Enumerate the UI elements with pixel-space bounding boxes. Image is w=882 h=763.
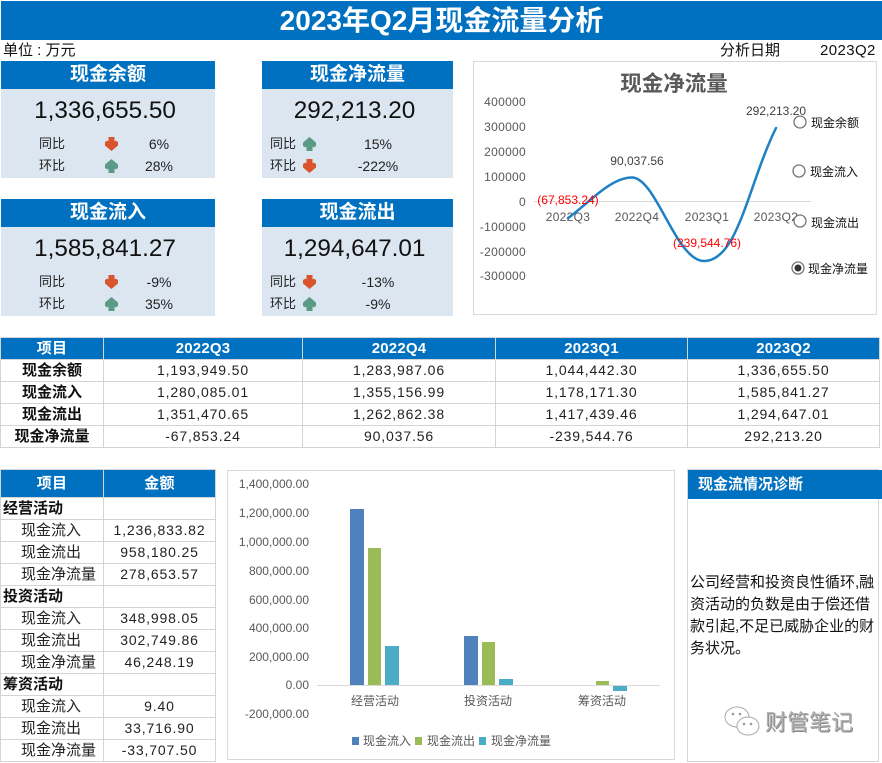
activity amount table (0, 469, 216, 762)
activity amount table: 46,248.19 (125, 654, 194, 670)
activity amount table: 现金流出 (21, 632, 81, 649)
quarterly data table: 1,355,156.99 (353, 384, 445, 400)
data labels (537, 104, 806, 250)
activity amount table: 302,749.86 (120, 632, 199, 648)
card heading (1, 61, 215, 89)
quarterly data table: 1,193,949.50 (157, 362, 249, 378)
legend (352, 733, 551, 748)
quarter on quarter label: 环比 (39, 296, 65, 311)
icon: up arrow (303, 137, 316, 151)
quarterly data table: 现金流入 (22, 384, 82, 401)
radio option: cash balance: 现金余额 (811, 115, 859, 130)
quarterly data table: 2023Q1 (564, 340, 619, 357)
icon: down arrow (105, 275, 118, 289)
category labels: 筹资活动 (578, 694, 626, 708)
title bar (1, 1, 882, 40)
radio option: cash balance (794, 115, 859, 130)
big number: 1,585,841.27 (34, 235, 176, 262)
activity amount table: 现金净流量 (21, 654, 96, 671)
card heading (262, 199, 453, 227)
quarterly data table: 1,262,862.38 (353, 406, 445, 422)
bars: operating activities (350, 509, 399, 685)
panel: cash balance card (1, 61, 215, 178)
quarter on quarter label: 环比 (270, 158, 296, 173)
quarterly data table: 1,044,442.30 (546, 362, 637, 378)
quarterly data table: 1,336,655.50 (738, 362, 829, 378)
unit label: 单位 : 万元 (3, 42, 76, 59)
line chart: net cash flow (473, 61, 877, 315)
y axis labels: 0.00 (286, 678, 309, 692)
bar chart: cash flow by activity (227, 470, 675, 760)
radio option: cash outflow: 现金流出 (811, 215, 859, 230)
activity amount table: 现金流入 (21, 522, 81, 539)
quarterly data table: 1,280,085.01 (157, 384, 249, 400)
y axis labels: 1,000,000.00 (239, 535, 309, 549)
quarter on quarter value: 35% (145, 296, 173, 312)
card heading: 现金流入 (70, 202, 146, 223)
activity amount table: 278,653.57 (120, 566, 199, 582)
data labels: 90,037.56 (610, 154, 664, 168)
icon: up arrow (105, 297, 118, 311)
activity amount table: 现金流出 (21, 544, 81, 561)
activity amount table: 现金流出 (21, 720, 81, 737)
activity amount table: 筹资活动 (3, 676, 63, 693)
y axis labels: 1,400,000.00 (239, 477, 309, 491)
diagnosis text (690, 574, 874, 657)
y axis labels: 400000 (484, 95, 526, 109)
quarter on quarter value: -222% (358, 158, 398, 174)
activity amount table: -33,707.50 (122, 742, 197, 758)
quarterly data table: 2023Q2 (756, 340, 811, 357)
year on year value: 15% (364, 136, 392, 152)
data labels: (239,544.76) (673, 236, 741, 250)
card heading: 现金净流量 (310, 64, 405, 85)
panel: cash inflow card (1, 199, 215, 316)
quarterly data table: -67,853.24 (165, 428, 241, 444)
quarter on quarter label: 环比 (270, 296, 296, 311)
analysis date label: 分析日期 (720, 42, 780, 59)
analysis date value: 2023Q2 (820, 42, 876, 59)
bars: financing activities (596, 681, 627, 691)
category labels: 2022Q4 (615, 210, 659, 224)
activity amount table: 现金净流量 (21, 742, 96, 759)
radio option: cash inflow (793, 164, 858, 179)
y axis labels: 600,000.00 (249, 593, 309, 607)
y axis labels: 800,000.00 (249, 564, 309, 578)
y axis labels: -300000 (480, 269, 526, 283)
big number: 1,336,655.50 (34, 97, 176, 124)
legend: 现金净流量 (491, 733, 551, 748)
title bar: 2023年Q2月现金流量分析 (280, 5, 603, 36)
quarterly data table: 2022Q3 (176, 340, 230, 357)
card heading (1, 199, 215, 227)
panel: net cash flow card (262, 61, 453, 178)
activity amount table: 现金流入 (21, 610, 81, 627)
diagnosis text: 务状况。 (690, 640, 750, 657)
y axis labels: -200,000.00 (245, 707, 309, 721)
activity amount table: 348,998.05 (120, 610, 199, 626)
y axis labels: -100000 (480, 220, 526, 234)
data labels: (67,853.24) (537, 193, 599, 207)
radio option: net cash flow selected: 现金净流量 (808, 261, 868, 276)
quarterly data table: -239,544.76 (549, 428, 634, 444)
year on year label: 同比 (39, 136, 65, 151)
quarterly data table: 项目 (37, 340, 67, 357)
activity amount table: 投资活动 (3, 588, 63, 605)
quarter on quarter value: 28% (145, 158, 173, 174)
year on year label: 同比 (270, 274, 296, 289)
activity amount table: 958,180.25 (120, 544, 199, 560)
legend: 现金流入 (363, 733, 411, 748)
y axis labels: -200000 (480, 245, 526, 259)
activity amount table: 9.40 (144, 698, 175, 714)
activity amount table: 项目 (37, 475, 67, 492)
icon: wechat watermark (724, 706, 760, 736)
activity amount table: 现金净流量 (21, 566, 96, 583)
y axis labels: 0 (519, 195, 526, 209)
category labels (546, 210, 798, 224)
quarterly data table: 1,294,647.01 (738, 406, 829, 422)
y axis labels: 1,200,000.00 (239, 506, 309, 520)
quarterly data table: 1,178,171.30 (546, 384, 637, 400)
radio option: cash inflow: 现金流入 (810, 164, 858, 179)
quarterly data table (0, 337, 880, 448)
chart title: 现金净流量 (620, 71, 728, 96)
diagnosis text: 公司经营和投资良性循环,融 (690, 574, 874, 591)
quarterly data table: 90,037.56 (364, 428, 434, 444)
activity amount table: 1,236,833.82 (114, 522, 205, 538)
quarterly data table: 现金余额 (22, 362, 82, 379)
diagnosis heading (688, 470, 882, 499)
quarterly data table: 292,213.20 (744, 428, 823, 444)
panel: cash flow diagnosis (687, 469, 879, 762)
activity amount table: 经营活动 (3, 500, 63, 517)
year on year label: 同比 (270, 136, 296, 151)
quarterly data table: 2022Q4 (372, 340, 426, 357)
y axis labels: 200,000.00 (249, 650, 309, 664)
data labels: 292,213.20 (746, 104, 806, 118)
activity amount table: 现金流入 (21, 698, 81, 715)
y axis labels: 300000 (484, 120, 526, 134)
activity amount table: 33,716.90 (125, 720, 194, 736)
quarterly data table: 现金净流量 (14, 428, 90, 445)
card heading: 现金余额 (70, 64, 146, 85)
quarter on quarter label: 环比 (39, 158, 65, 173)
icon: up arrow (303, 297, 316, 311)
diagnosis heading: 现金流情况诊断 (698, 476, 803, 493)
category labels: 2023Q1 (685, 210, 729, 224)
category labels (351, 693, 626, 708)
y axis labels (480, 95, 526, 283)
big number: 292,213.20 (294, 97, 415, 124)
watermark text: 财管笔记 (765, 710, 853, 735)
panel: cash outflow card (262, 199, 453, 316)
activity amount table: 金额 (144, 475, 175, 492)
icon: up arrow (105, 159, 118, 173)
year on year value: 6% (149, 136, 169, 152)
y axis labels: 200000 (484, 145, 526, 159)
category labels: 2023Q2 (754, 210, 798, 224)
year on year value: -13% (362, 274, 394, 290)
diagnosis text: 款引起,不足已威胁企业的财 (690, 618, 874, 635)
category labels: 投资活动 (464, 693, 512, 708)
big number: 1,294,647.01 (284, 235, 425, 262)
quarterly data table: 现金流出 (22, 406, 82, 423)
y axis labels: 100000 (484, 170, 526, 184)
card heading: 现金流出 (319, 202, 396, 223)
bars: investing activities (464, 636, 513, 685)
category labels: 2022Q3 (546, 210, 590, 224)
icon: down arrow (105, 137, 118, 151)
card heading (262, 61, 453, 89)
y axis labels: 400,000.00 (249, 621, 309, 635)
quarter on quarter value: -9% (366, 296, 390, 312)
year on year label: 同比 (39, 274, 65, 289)
quarterly data table: 1,417,439.46 (546, 406, 637, 422)
category labels: 经营活动 (351, 694, 399, 708)
net cash flow curve (568, 128, 776, 261)
quarterly data table: 1,283,987.06 (353, 362, 445, 378)
quarterly data table: 1,351,470.65 (157, 406, 249, 422)
year on year value: -9% (147, 274, 171, 290)
icon: down arrow (303, 159, 316, 173)
icon: down arrow (303, 275, 316, 289)
diagnosis text: 资活动的负数是由于偿还借 (690, 596, 870, 613)
radio option: cash outflow (794, 215, 859, 230)
y axis labels (239, 477, 309, 721)
quarterly data table: 1,585,841.27 (738, 384, 829, 400)
legend: 现金流出 (427, 733, 475, 748)
